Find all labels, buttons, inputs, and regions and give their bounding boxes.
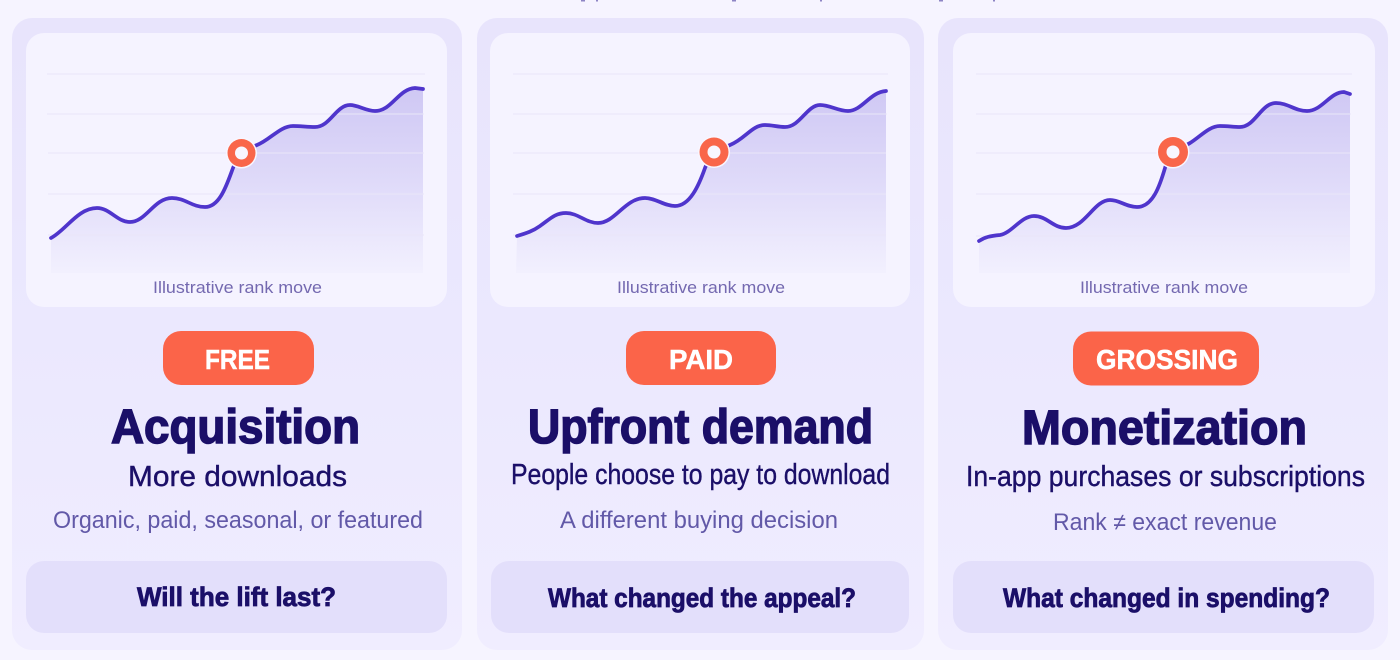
heading: Monetization	[1022, 402, 1307, 455]
badge: GROSSING	[1073, 332, 1259, 386]
subheading: More downloads	[128, 461, 347, 493]
question box: What changed in spending?	[1003, 583, 1330, 613]
panel: free	[12, 18, 462, 650]
chart caption: Illustrative rank move	[617, 278, 785, 297]
chart caption: Illustrative rank move	[1080, 278, 1248, 297]
note: Organic, paid, seasonal, or featured	[53, 507, 423, 534]
note: A different buying decision	[560, 507, 838, 534]
chart: paid rank move	[490, 33, 910, 307]
chart caption: Illustrative rank move	[153, 278, 322, 297]
question box	[953, 561, 1374, 633]
question box	[491, 561, 909, 633]
question box	[26, 561, 447, 633]
question box: What changed the appeal?	[548, 583, 856, 613]
heading: Acquisition	[111, 401, 360, 454]
panel: paid	[477, 18, 924, 650]
badge: GROSSING: GROSSING	[1096, 344, 1238, 375]
subheading: People choose to pay to download	[511, 459, 890, 491]
note: Rank ≠ exact revenue	[1053, 509, 1277, 536]
badge: PAID: PAID	[669, 344, 733, 375]
badge: PAID	[626, 331, 776, 385]
marker: rank jump	[226, 138, 257, 168]
heading: Upfront demand	[528, 401, 873, 454]
badge: FREE	[163, 331, 314, 385]
marker: rank jump	[698, 136, 730, 168]
badge: FREE: FREE	[205, 344, 270, 375]
question box: Will the lift last?	[137, 582, 336, 612]
marker: rank jump	[1156, 136, 1190, 168]
chart: grossing rank move	[953, 33, 1375, 307]
subheading: In-app purchases or subscriptions	[966, 461, 1365, 493]
panel: grossing	[938, 18, 1388, 650]
chart: free rank move	[26, 33, 447, 307]
clipped heading remnants	[581, 0, 995, 2]
